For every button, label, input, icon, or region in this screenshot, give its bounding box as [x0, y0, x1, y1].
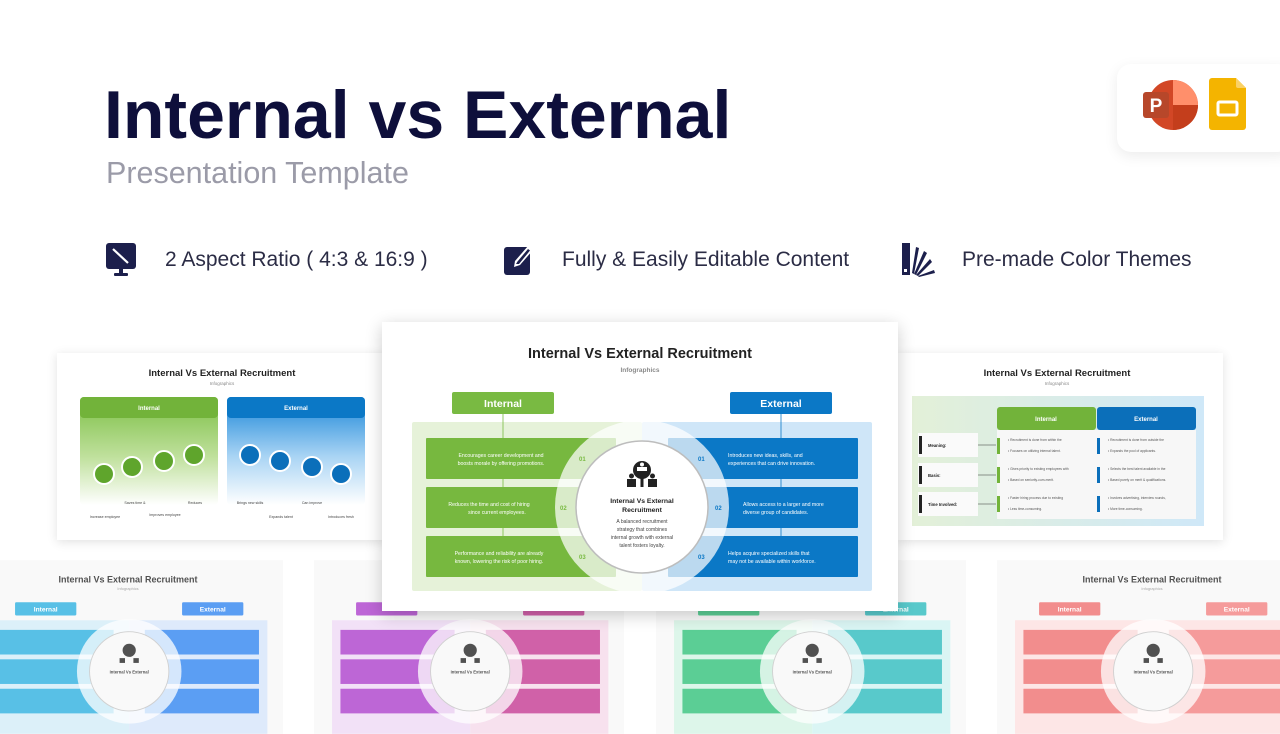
- left slide: timeline infographic: Saves time &: [124, 501, 146, 505]
- header: external: External: [760, 398, 802, 410]
- left slide: timeline infographic: [57, 353, 387, 540]
- main slide: circle comparison: 02: [715, 506, 722, 512]
- header: internal: Internal: [484, 398, 522, 410]
- right slide: comparison table: • Less time-consuming.: [1008, 507, 1042, 511]
- icon: people: [627, 461, 657, 487]
- feature: color themes: [902, 243, 1192, 277]
- right slide: comparison table: • Selects the best talent available in the: [1108, 467, 1166, 471]
- header: external: [730, 392, 832, 414]
- bottom slide 2: purple theme: [332, 602, 608, 734]
- left slide: timeline infographic: Infographics: [210, 381, 235, 386]
- bottom slide 4: salmon theme: Infographics: [1141, 586, 1163, 591]
- center circle: strategy that combines: [617, 527, 668, 533]
- right slide: comparison table: • Recruitment is done from within the: [1008, 438, 1062, 442]
- right slide: comparison table: [898, 353, 1223, 540]
- main slide: circle comparison: Allows access to a larger and more: [743, 502, 824, 508]
- center circle: [576, 441, 708, 573]
- right slide: comparison table: • Gives priority to existing employees with: [1008, 467, 1069, 471]
- feature: editable: Fully & Easily Editable Content: [562, 248, 849, 271]
- external rows: [668, 438, 858, 577]
- main slide: circle comparison: Performance and reliability are already: [455, 551, 544, 557]
- center circle: talent fosters loyalty.: [619, 543, 665, 549]
- main slide: circle comparison: 03: [698, 555, 705, 561]
- bottom slide 4: salmon theme: Internal: [1058, 606, 1082, 613]
- main slide: circle comparison: Reduces the time and cost of hiring: [448, 502, 530, 508]
- right slide: comparison table: Infographics: [1045, 381, 1070, 386]
- icon: powerpoint: [1143, 80, 1198, 130]
- bottom slide 1: cyan/blue theme: External: [200, 606, 226, 613]
- left slide: timeline infographic: Reduces: [188, 501, 202, 505]
- feature: editable: [504, 247, 849, 275]
- left slide: timeline infographic: Internal: [138, 406, 160, 412]
- right slide: comparison table: • Faster hiring process due to existing: [1008, 496, 1063, 500]
- main slide: circle comparison: 02: [560, 506, 567, 512]
- main slide: circle comparison: Helps acquire specialized skills that: [728, 551, 810, 557]
- left slide: timeline infographic: Improves employee: [149, 513, 181, 517]
- bottom slide 4: salmon theme: External: [1224, 606, 1250, 613]
- right slide: comparison table: Time Involved:: [928, 502, 957, 507]
- main slide: circle comparison: experiences that can drive innovation.: [728, 461, 815, 467]
- right slide: comparison table: • Based on seniority-cum-merit.: [1008, 478, 1054, 482]
- icon: monitor: [106, 243, 136, 276]
- header: internal: [452, 392, 554, 414]
- bottom slide 1: cyan/blue theme: Internal: [34, 606, 58, 613]
- bottom slide 4: salmon theme: [1015, 574, 1280, 734]
- icon: color fan: [902, 243, 935, 277]
- subtitle: Presentation Template: [106, 156, 409, 190]
- main slide: circle comparison: Infographics: [620, 367, 660, 374]
- center circle: Recruitment: [622, 507, 663, 514]
- center circle: Internal Vs External: [610, 498, 674, 505]
- feature: aspect ratio: [106, 243, 428, 276]
- right slide: comparison table: • Recruitment is done from outside the: [1108, 438, 1164, 442]
- app icons card: [1117, 64, 1280, 152]
- main slide: circle comparison: 01: [698, 457, 705, 463]
- feature: aspect ratio: 2 Aspect Ratio ( 4:3 & 16:9 ): [165, 248, 428, 271]
- feature: color themes: Pre-made Color Themes: [962, 248, 1192, 271]
- left slide: timeline infographic: Expands talent: [269, 515, 293, 519]
- right slide: comparison table: Internal: [1035, 417, 1057, 423]
- right slide: comparison table: • Focuses on utilizing internal talent.: [1008, 449, 1061, 453]
- main slide: circle comparison: Introduces new ideas, skills, and: [728, 453, 803, 459]
- right slide: comparison table: • More time-consuming.: [1108, 507, 1143, 511]
- icon: google slides: [1209, 78, 1246, 130]
- main slide: circle comparison: may not be available within workforce.: [728, 559, 816, 565]
- main slide: circle comparison: 01: [579, 457, 586, 463]
- main slide: circle comparison: since current employees.: [468, 510, 526, 516]
- bottom slide 1: cyan/blue theme: Infographics: [117, 586, 139, 591]
- bottom slide 1: cyan/blue theme: Internal Vs External: [110, 670, 149, 675]
- right slide: comparison table: Meaning:: [928, 443, 946, 448]
- main slide: circle comparison: diverse group of candidates.: [743, 510, 808, 516]
- main slide: circle comparison: Encourages career development and: [458, 453, 544, 459]
- internal rows: [426, 438, 616, 577]
- left slide: timeline infographic: Can improve: [302, 501, 322, 505]
- left slide: timeline infographic: Increase employee: [90, 515, 120, 519]
- main slide: circle comparison: known, lowering the risk of poor hiring.: [455, 559, 543, 565]
- right slide: comparison table: • Expands the pool of applicants.: [1108, 449, 1156, 453]
- left slide: timeline infographic: External: [284, 406, 308, 412]
- bottom slide 2: purple theme: Internal Vs External: [451, 670, 490, 675]
- icon: pencil: [504, 247, 530, 275]
- main slide: circle comparison: boosts morale by offering promotions.: [458, 461, 544, 467]
- right slide: comparison table: • Involves advertising, interview rounds,: [1108, 496, 1166, 500]
- right slide: comparison table: Internal Vs External Recruitment: [984, 368, 1131, 379]
- bottom slide 4: salmon theme: Internal Vs External Recruitment: [1082, 574, 1222, 584]
- bottom slide 1: cyan/blue theme: Internal Vs External Recruitment: [58, 574, 198, 584]
- icon: powerpoint: P: [1150, 96, 1163, 117]
- bottom slide 3: green/teal theme: External: [883, 606, 909, 613]
- right slide: comparison table: • Based purely on merit & qualifications.: [1108, 478, 1166, 482]
- left slide: timeline infographic: Internal Vs External Recruitment: [149, 368, 296, 379]
- bottom slide 4: salmon theme: Internal Vs External: [1134, 670, 1173, 675]
- bottom slide 3: green/teal theme: [674, 602, 950, 734]
- right slide: comparison table: External: [1134, 417, 1158, 423]
- halo: [555, 420, 729, 594]
- center circle: internal growth with external: [611, 535, 673, 541]
- right slide: comparison table: Basis:: [928, 473, 941, 478]
- left slide: timeline infographic: Introduces fresh: [328, 515, 354, 519]
- main slide: circle comparison: 03: [579, 555, 586, 561]
- center circle: A balanced recruitment: [616, 519, 668, 525]
- title: Internal vs External: [104, 77, 731, 153]
- main slide: circle comparison: [382, 322, 898, 611]
- bottom slide 1: cyan/blue theme: [0, 574, 268, 734]
- slide title: Internal Vs External Recruitment: [528, 346, 752, 362]
- bottom slide 3: green/teal theme: Internal Vs External: [793, 670, 832, 675]
- left slide: timeline infographic: Brings new skills: [237, 501, 263, 505]
